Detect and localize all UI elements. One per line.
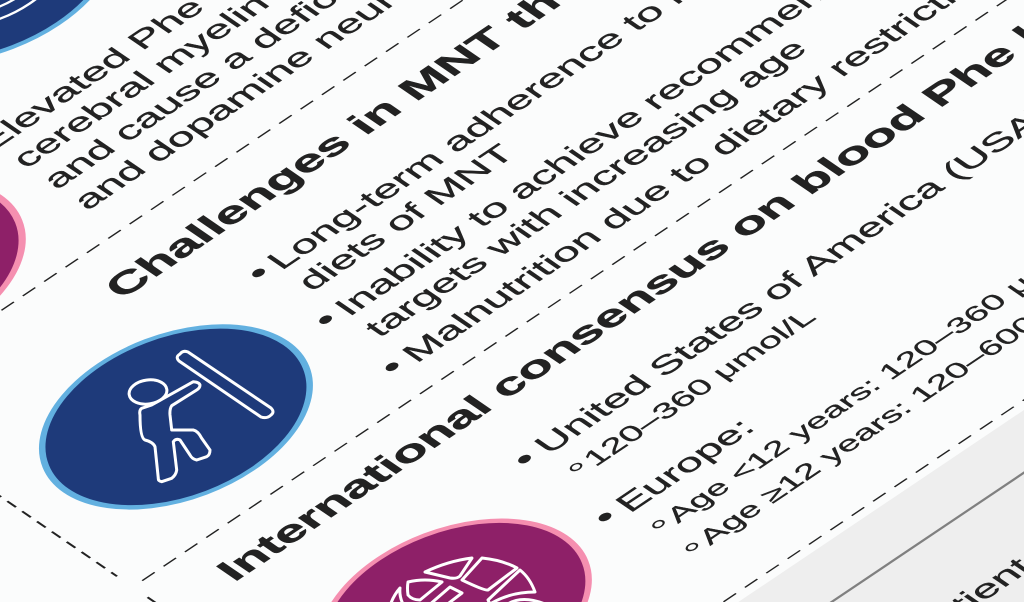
- icon: blue circle with spiral: [0, 0, 167, 97]
- icon: purple circle background: [269, 485, 641, 602]
- panel: grey lower section: [453, 0, 1024, 602]
- icon: globe lattice: [390, 558, 545, 602]
- list: international consensus: 120–360 μmol/L: [576, 305, 822, 471]
- icon: person pushing against barrier: [128, 351, 273, 482]
- list: challenges: diets of MNT: [289, 139, 522, 295]
- icon: blue circle background: [0, 291, 362, 543]
- list: challenges: targets with increasing age: [357, 34, 814, 342]
- list: international consensus: Europe:: [607, 413, 762, 517]
- icon: pink circle, partly off page: [0, 145, 74, 396]
